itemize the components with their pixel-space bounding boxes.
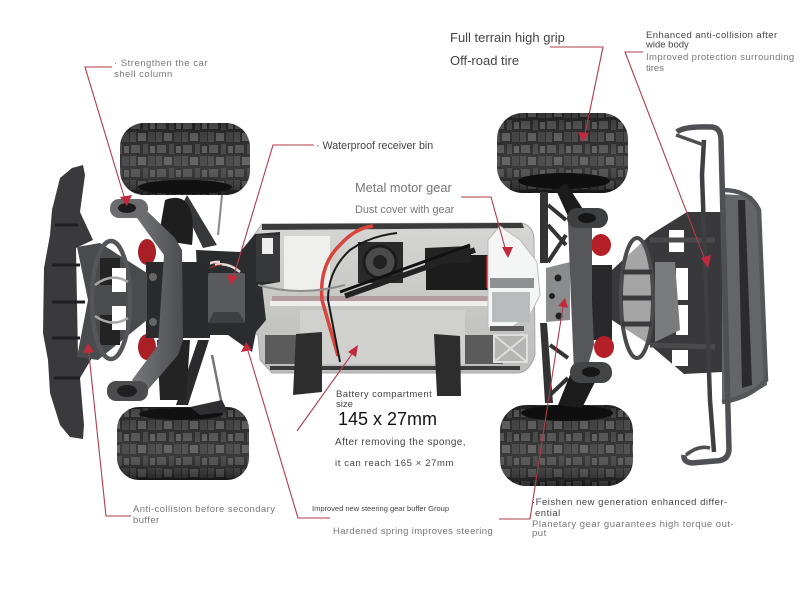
wires	[192, 226, 397, 362]
leader: front bumper	[88, 345, 131, 516]
callout leaders and arrows	[85, 47, 707, 519]
transparent gear dust cover	[488, 226, 540, 331]
label: strengthen shell column	[114, 58, 208, 80]
label: wide body: Improved protection surrounding	[646, 52, 795, 63]
battery straps	[293, 332, 461, 396]
right suspension arms and springs	[540, 183, 595, 408]
label: wide body: wide body	[645, 40, 689, 50]
black electronics plate	[196, 232, 280, 352]
label: front buffer	[133, 504, 275, 526]
left gearbox	[146, 262, 210, 338]
arrowheads	[83, 132, 711, 357]
label: motor gear: Dust cover with gear	[355, 204, 455, 216]
label: front buffer: buffer	[133, 515, 160, 526]
label: differential: put	[532, 528, 547, 539]
label: strengthen shell column: shell column	[114, 69, 173, 80]
front left tire	[120, 123, 250, 195]
rear shock tower and cradle	[612, 212, 722, 374]
label: differential: ·Feishen new generation enhanced differ-	[532, 497, 728, 508]
rear bumper side panel	[722, 190, 767, 402]
front right tire	[497, 113, 628, 193]
chassis plate and battery tray	[208, 223, 535, 373]
label: battery compartment: 145 x 27mm	[338, 409, 437, 429]
label: battery compartment	[335, 389, 466, 469]
left suspension arms and springs	[157, 195, 228, 415]
label: front buffer: Anti-collision before secondary	[133, 504, 275, 515]
leader: motor gear	[461, 197, 507, 255]
label: wide body: Enhanced anti-collision after	[646, 30, 778, 41]
label: motor gear: Metal motor gear	[355, 180, 452, 195]
label: motor gear	[355, 180, 455, 216]
label: differential	[532, 497, 734, 539]
leader: tire	[550, 47, 603, 139]
label: strengthen shell column: · Strengthen the car	[114, 58, 208, 69]
leader: battery	[297, 347, 357, 431]
label: differential: ential	[535, 508, 561, 519]
label: battery compartment: it can reach 165 × 27mm	[335, 458, 454, 469]
label: steering buffer	[312, 504, 493, 537]
leader: steering buffer	[246, 344, 330, 518]
rear bumper tube frame	[676, 127, 729, 463]
label: tire	[450, 30, 565, 68]
label: tire: Off-road tire	[450, 53, 519, 68]
label: steering buffer: Improved new steering gear buffer Group	[312, 504, 449, 513]
leader: wide body	[625, 52, 707, 265]
rear gearbox	[546, 262, 612, 340]
label: steering buffer: Hardened spring improves steering	[333, 526, 493, 537]
front shock tower and loop	[77, 241, 147, 360]
label: wide body	[645, 30, 795, 74]
leader: differential	[499, 300, 564, 519]
label: battery compartment: size	[336, 399, 353, 410]
rear left tire	[117, 407, 249, 480]
label: battery compartment: Battery compartment	[336, 389, 432, 400]
leader: receiver bin	[232, 145, 314, 282]
rear beam	[567, 208, 612, 383]
rear right tire	[500, 405, 633, 486]
leader: shell column	[85, 67, 126, 203]
label: waterproof receiver bin: · Waterproof receiver bin	[316, 140, 433, 152]
front bumper	[43, 165, 93, 439]
electronic speed controller and fan	[358, 242, 403, 283]
rear loop	[621, 238, 653, 358]
left shell column beam	[107, 199, 183, 401]
label: battery compartment: After removing the sponge,	[335, 437, 466, 448]
motor	[340, 245, 495, 296]
receiver bin	[208, 273, 245, 323]
label: tire: Full terrain high grip	[450, 30, 565, 45]
rear red hubs	[591, 234, 614, 358]
label: wide body: tires	[646, 63, 664, 74]
left red hubs	[138, 239, 156, 360]
label: differential: Planetary gear guarantees high torque out-	[532, 519, 734, 530]
